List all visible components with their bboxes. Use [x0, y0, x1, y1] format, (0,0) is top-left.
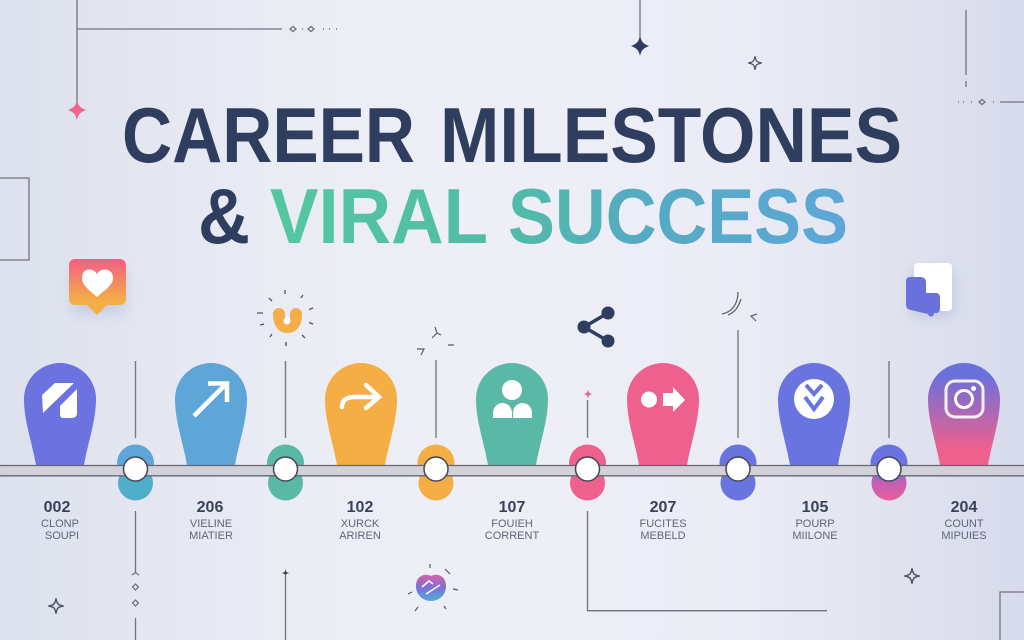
milestone label 7: MIPUIES — [941, 530, 987, 542]
title line one — [122, 91, 902, 179]
milestone label 2 — [189, 499, 233, 542]
pin 3 — [325, 363, 397, 465]
icon: pin 4 people — [493, 380, 532, 418]
decorative box left — [0, 178, 29, 260]
pin 4 — [476, 363, 548, 465]
title line one: CAREER — [122, 91, 415, 179]
milestone label 2: MIATIER — [189, 530, 233, 542]
milestone label 4 — [485, 499, 539, 542]
node discs — [117, 444, 908, 500]
milestone label 3: XURCK — [341, 518, 380, 530]
milestone label 4: CORRENT — [485, 530, 539, 542]
decorative outline star top — [748, 56, 762, 70]
icon: ticks above third connector — [417, 327, 454, 355]
connector lines — [136, 330, 889, 438]
title — [122, 91, 902, 260]
milestone label 7: COUNT — [944, 518, 984, 530]
title line one: MILESTONES — [440, 91, 902, 179]
decorative outline star bottom left — [48, 598, 64, 614]
pin 2 — [175, 363, 247, 465]
icon: share — [578, 306, 614, 348]
decorative frame: top left with pink star — [68, 0, 337, 120]
milestone label 7 — [941, 499, 987, 542]
icon: pin 3 arrow — [342, 385, 379, 408]
title line two — [198, 172, 848, 260]
decorative outline star bottom right — [904, 568, 920, 584]
icon: bottom gradient badge — [408, 564, 458, 611]
icon: pin 5 dot and arrow — [641, 387, 685, 412]
milestone label 1: SOUPI — [45, 530, 79, 542]
icon: feather ticks — [722, 292, 757, 321]
milestone label 4: FOUIEH — [491, 518, 533, 530]
milestone label 1 — [41, 499, 79, 542]
milestone label 3: ARIREN — [339, 530, 381, 542]
pin 7 — [928, 363, 1000, 465]
milestone label 1: 002 — [44, 499, 70, 516]
icon: pin 7 camera — [946, 381, 983, 417]
decorative frame: top right — [958, 10, 1024, 104]
lower connector 1 with diamonds — [132, 511, 139, 640]
milestone label 6: MIILONE — [792, 530, 838, 542]
icon: pin 2 arrow — [194, 384, 227, 416]
milestone label 5: 207 — [650, 499, 676, 516]
icon: magnet with rays — [257, 290, 313, 346]
milestone label 4: 107 — [499, 499, 525, 516]
icon: layered card — [906, 263, 952, 317]
milestone label 7: 204 — [951, 499, 977, 516]
pin 6 — [778, 363, 850, 465]
milestone label 1: CLONP — [41, 518, 79, 530]
pin 5 — [627, 363, 699, 465]
milestone label 5 — [639, 499, 687, 542]
decorative box bottom right — [1000, 592, 1024, 640]
milestone label 6 — [792, 499, 838, 542]
pink star above fourth connector — [583, 389, 593, 399]
lower connector 2 with star — [282, 569, 290, 640]
title line two: & — [198, 172, 250, 260]
icon: pin 6 badge — [794, 379, 834, 419]
milestone label 5: MEBELD — [640, 530, 686, 542]
milestone label 3 — [339, 499, 381, 542]
icon: pin 1 tiles — [42, 383, 77, 418]
milestone label 3: 102 — [347, 499, 373, 516]
timeline bar — [0, 465, 1024, 476]
title line two: SUCCESS — [508, 172, 848, 260]
lower connector 4 elbow — [588, 511, 827, 611]
title line two: VIRAL — [270, 172, 488, 260]
milestone label 2: 206 — [197, 499, 223, 516]
pin 1 — [24, 363, 96, 465]
milestone label 6: 105 — [802, 499, 828, 516]
milestone label 6: POURP — [795, 518, 835, 530]
milestone label 5: FUCITES — [639, 518, 687, 530]
decorative navy star with line — [631, 0, 649, 56]
icon: like heart bubble — [69, 259, 126, 315]
timeline nodes — [124, 457, 901, 481]
milestone label 2: VIELINE — [190, 518, 232, 530]
